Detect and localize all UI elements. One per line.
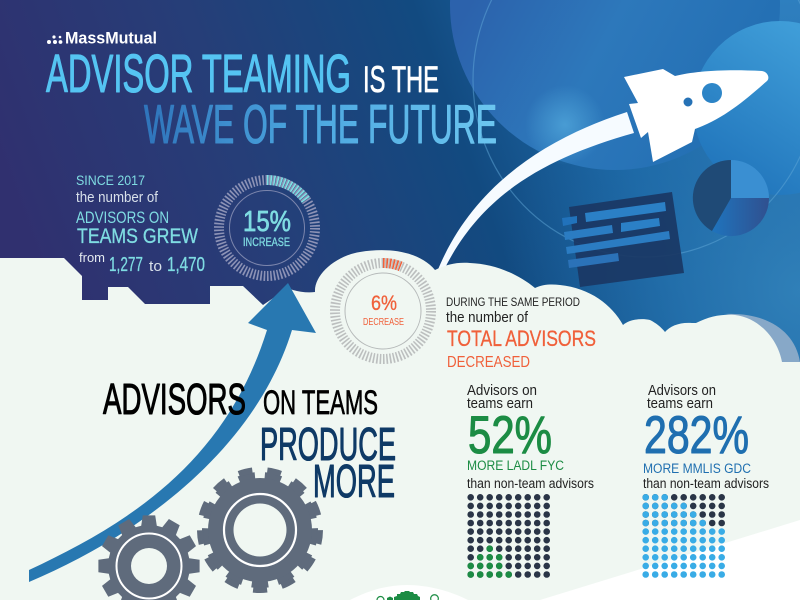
stat: 282%: MORE MMLIS GDC xyxy=(643,461,751,476)
heading: advisors on teams produce more: ON TEAMS xyxy=(263,384,378,422)
stat: 52%: 52% xyxy=(468,406,552,465)
text: since 2017: the number of xyxy=(76,189,159,206)
title: ADVISOR TEAMING xyxy=(46,44,351,104)
stat: 282%: 282% xyxy=(644,406,749,465)
heading: advisors on teams produce more: PRODUCE xyxy=(260,418,396,470)
text: since 2017: to xyxy=(149,258,162,275)
cloud landscape xyxy=(0,250,800,600)
bottom badge with green gear xyxy=(350,585,468,600)
rocket xyxy=(624,69,768,162)
stat: 282% xyxy=(643,383,769,491)
title xyxy=(46,44,497,155)
ring: 6% decrease xyxy=(335,263,431,359)
heading: advisors on teams produce more xyxy=(103,375,396,507)
ring: 6% decrease: DECREASE xyxy=(363,316,404,328)
ring: 6% decrease: 6% xyxy=(371,292,397,315)
ring: 15% increase: INCREASE xyxy=(243,235,290,249)
text: total advisors decreased: DURING THE SAME PERIOD xyxy=(446,295,580,309)
cloud shadow crescent xyxy=(725,314,800,362)
text: since 2017: 1,277 xyxy=(109,254,143,276)
dot grid: 282% xyxy=(646,497,723,574)
heading: advisors on teams produce more: ADVISORS xyxy=(103,375,246,424)
pie chart icon xyxy=(693,160,769,236)
text: since 2017: from xyxy=(79,250,105,265)
text: since 2017: 1,470 xyxy=(167,254,205,276)
decorative lighter circles xyxy=(450,0,800,400)
text: since 2017: TEAMS GREW xyxy=(77,225,198,248)
stat: 52%: MORE LADL FYC xyxy=(467,458,564,473)
text: total advisors decreased: the number of xyxy=(446,309,529,326)
stat: 52%: Advisors on xyxy=(467,383,537,399)
stat: 282%: Advisors on xyxy=(648,383,716,399)
text: total advisors decreased: TOTAL ADVISORS xyxy=(447,326,596,351)
heading: advisors on teams produce more: MORE xyxy=(313,455,395,507)
stat: 52%: than non-team advisors xyxy=(467,476,594,491)
dot grid: 52% xyxy=(471,497,547,574)
title: WAVE OF THE FUTURE xyxy=(144,93,497,155)
text: total advisors decreased xyxy=(446,295,596,371)
white corner wedge xyxy=(540,520,800,600)
small gear xyxy=(98,515,200,600)
stat: 52%: teams earn xyxy=(467,396,533,412)
ring: 15% increase xyxy=(219,180,315,276)
ring: 15% increase: 15% xyxy=(243,206,291,238)
text: total advisors decreased: DECREASED xyxy=(447,354,530,371)
text: since 2017 xyxy=(76,172,205,276)
large gear xyxy=(183,453,337,600)
title: IS THE xyxy=(363,59,439,100)
stat: 282%: teams earn xyxy=(647,396,713,412)
logo: MassMutual: MassMutual xyxy=(65,28,157,48)
text: since 2017: ADVISORS ON xyxy=(76,209,169,227)
stat: 282%: than non-team advisors xyxy=(643,476,769,491)
rocket trail xyxy=(437,112,634,272)
document icon xyxy=(562,192,684,287)
growth arrow xyxy=(29,283,316,582)
text: since 2017: SINCE 2017 xyxy=(76,172,145,188)
stat: 52% xyxy=(467,383,594,491)
